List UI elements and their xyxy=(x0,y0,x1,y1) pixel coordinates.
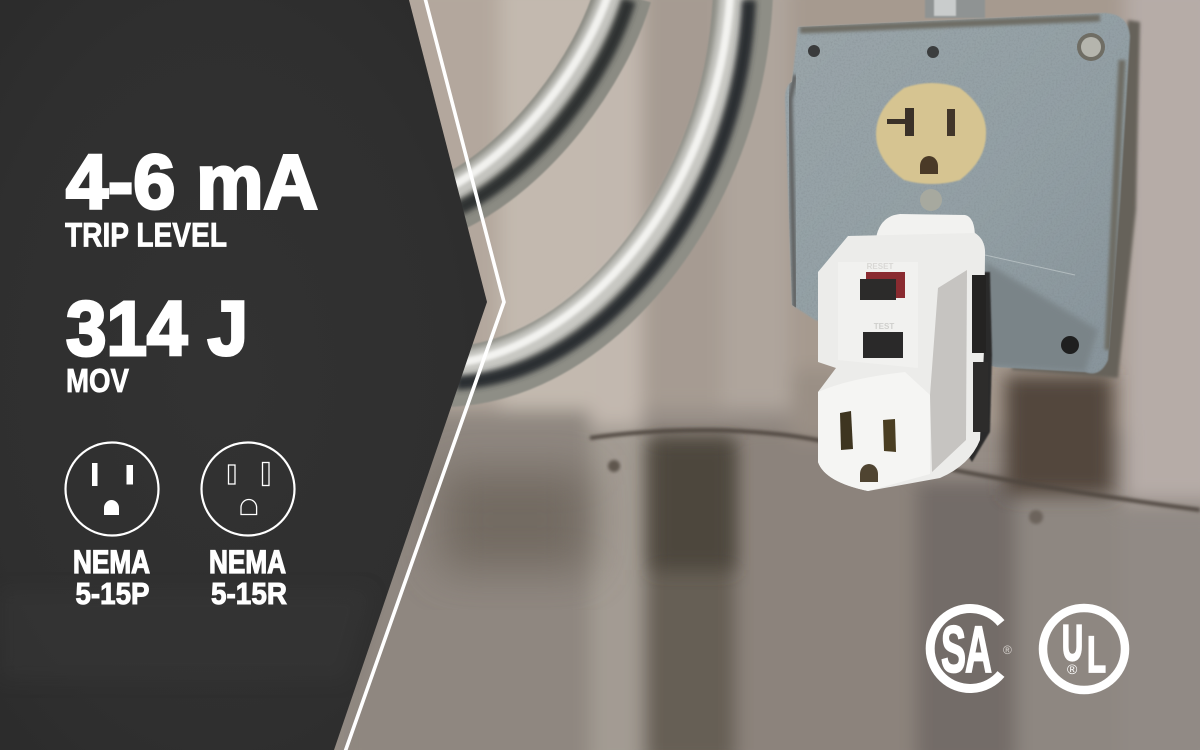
label: NEMA 5-15P xyxy=(73,544,150,611)
icon: CSA certification mark: A xyxy=(965,612,992,686)
adapter slots xyxy=(840,411,853,450)
GFCI adapter xyxy=(818,214,992,491)
reset button xyxy=(866,272,905,298)
GFCI adapter: TEST xyxy=(874,322,894,331)
icon: NEMA 5-15R receptacle xyxy=(202,442,294,536)
white chevron outline xyxy=(345,0,504,750)
trip level value: 4-6 mA xyxy=(66,140,318,226)
metal junction box xyxy=(780,10,1140,380)
dark spec panel xyxy=(0,0,487,750)
conduit pipe: inner xyxy=(441,0,629,209)
icon: CSA certification mark xyxy=(930,608,1012,688)
icon: UL certification mark xyxy=(1043,608,1125,690)
photo background: corrugated wall xyxy=(398,0,1200,750)
label: NEMA 5-15R: NEMA xyxy=(209,544,286,580)
box screws xyxy=(1077,33,1105,61)
darker top of the dark stripe xyxy=(652,440,734,570)
icon: UL certification mark: L xyxy=(1087,626,1106,683)
receptacle xyxy=(876,83,986,184)
shadow patch on lower-left wall xyxy=(440,470,590,570)
icon: UL certification mark: ® xyxy=(1067,661,1078,677)
panel lighter lower band xyxy=(0,590,371,680)
label: NEMA 5-15R: 5-15R xyxy=(211,576,287,611)
test button xyxy=(863,332,903,358)
conduit pipe: outer xyxy=(438,0,749,383)
icon: CSA certification mark: S xyxy=(941,612,966,686)
spec: trip level xyxy=(65,140,318,254)
shadow beside the box xyxy=(1005,375,1113,495)
adapter side label xyxy=(972,275,986,353)
pipe stub above box xyxy=(925,0,985,18)
icon: CSA certification mark: ® xyxy=(1003,643,1012,657)
MOV label: MOV xyxy=(66,362,129,399)
adapter button labels: RESET xyxy=(867,262,893,271)
icon: UL certification mark: U xyxy=(1062,615,1083,671)
spec: MOV xyxy=(66,286,248,399)
label: NEMA 5-15P: NEMA xyxy=(73,544,150,580)
label: NEMA 5-15R xyxy=(209,544,287,611)
trip level label: TRIP LEVEL xyxy=(65,216,227,254)
label: NEMA 5-15P: 5-15P xyxy=(76,576,150,611)
icon: NEMA 5-15P plug xyxy=(66,442,158,536)
MOV value: 314 J xyxy=(66,286,248,372)
wall crease xyxy=(590,430,1200,510)
